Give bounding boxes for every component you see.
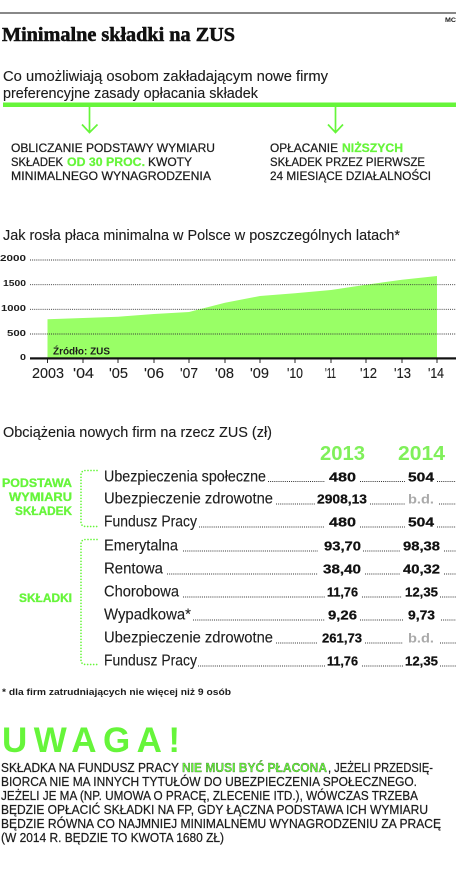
x axis labels: [32, 366, 444, 382]
row: ubezpieczenie zdrowotne: [104, 490, 434, 508]
row: emerytalna: 93,70: [324, 538, 361, 554]
source: Źródło: ZUS: [53, 344, 110, 358]
table: [2, 443, 456, 670]
section 1: preferential rules: [3, 68, 456, 183]
row: fundusz pracy: [104, 652, 438, 670]
label: składki: SKŁADKI: [19, 593, 72, 605]
title: Minimalne składki na ZUS: [2, 24, 235, 46]
row: fundusz pracy: 504: [408, 514, 435, 530]
green bar: [3, 102, 456, 107]
x axis labels: 2003: [32, 366, 64, 382]
row: rentowa: 40,32: [403, 562, 440, 576]
bracket 2: [81, 540, 97, 664]
warning text: BIORCA NIE MA INNYCH TYTUŁÓW DO UBEZPIECZENIA SPOŁECZNEGO.: [1, 774, 417, 789]
table heading: Obciążenia nowych firm na rzecz ZUS (zł): [3, 424, 272, 441]
row: fundusz pracy: 11,76: [327, 654, 358, 668]
row: wypadkowa: 9,73: [408, 608, 435, 622]
intro text: preferencyjne zasady opłacania składek: [3, 85, 258, 102]
row: ubezpieczenie zdrowotne: b.d.: [408, 492, 434, 506]
y axis labels: 0: [20, 352, 26, 362]
y axis labels: 1000: [1, 303, 26, 313]
row: ubezpieczenie zdrowotne: b.d.: [408, 630, 434, 646]
warning text: BĘDZIE OPŁACIĆ SKŁADKI NA FP, GDY ŁĄCZNA PODSTAWA ICH WYMIARU: [1, 802, 428, 817]
row: ubezpieczenie zdrowotne: Ubezpieczenie zdrowotne: [104, 630, 273, 646]
row: chorobowa: 11,76: [327, 584, 358, 600]
intro text: Co umożliwiają osobom zakładającym nowe firmy: [3, 68, 328, 85]
row: fundusz pracy: Fundusz Pracy: [104, 514, 197, 530]
arrow left: [82, 107, 98, 132]
row: wypadkowa: [104, 606, 435, 624]
footnote: * dla firm zatrudniających nie więcej niż 9 osób: [2, 687, 231, 698]
x axis labels: '12: [360, 366, 377, 382]
right text: [270, 142, 431, 183]
warning text: BĘDZIE RÓWNA CO NAJMNIEJ MINIMALNEMU WYNAGRODZENIU ZA PRACĘ: [1, 816, 441, 831]
left text: [11, 143, 215, 183]
row: emerytalna: Emerytalna: [104, 538, 178, 554]
row: ubezpieczenie zdrowotne: Ubezpieczenie zdrowotne: [104, 490, 273, 508]
dot leaders: [167, 482, 456, 666]
row: emerytalna: 98,38: [403, 538, 440, 554]
x axis labels: '09: [250, 366, 269, 382]
chart heading: Jak rosła płaca minimalna w Polsce w poszczególnych latach*: [3, 227, 400, 244]
arrow right: [328, 107, 343, 132]
x axis labels: '13: [394, 366, 411, 382]
row: ubezpieczenia społeczne: Ubezpieczenia społeczne: [104, 468, 266, 486]
x axis labels: '14: [428, 366, 444, 382]
row: wypadkowa: Wypadkowa*: [104, 606, 191, 624]
credit: MC: [445, 17, 456, 24]
row: wypadkowa: 9,26: [328, 608, 357, 622]
row: ubezpieczenia społeczne: [104, 468, 435, 486]
row: emerytalna: [104, 538, 440, 554]
warning heading: UWAGA!: [2, 721, 180, 760]
group label: podstawa wymiaru składek: SKŁADEK: [15, 506, 73, 518]
bracket 1: [81, 470, 97, 526]
warning text: , JEŻELI PRZEDSIĘ-: [328, 761, 433, 775]
left text: OD 30 PROC.: [67, 157, 145, 169]
row: ubezpieczenia społeczne: 504: [408, 470, 435, 484]
row: rentowa: 38,40: [323, 562, 361, 576]
right text: OPŁACANIE: [270, 143, 338, 155]
y axis labels: 500: [7, 328, 26, 338]
row: fundusz pracy: Fundusz Pracy: [104, 652, 197, 670]
area chart: [0, 253, 456, 382]
group label: podstawa wymiaru składek: [2, 478, 73, 518]
row: rentowa: [104, 560, 440, 578]
intro text: [3, 68, 328, 102]
year headers: 2014: [398, 443, 446, 465]
row: chorobowa: [104, 584, 438, 600]
right text: 24 MIESIĄCE DZIAŁALNOŚCI: [270, 170, 431, 183]
year headers: 2013: [320, 443, 365, 465]
row: fundusz pracy: 12,35: [405, 654, 438, 668]
x axis labels: '04: [73, 366, 94, 382]
warning text: [1, 760, 441, 845]
group label: podstawa wymiaru składek: PODSTAWA: [2, 478, 72, 490]
row: ubezpieczenie zdrowotne: 2908,13: [317, 492, 367, 506]
right text: SKŁADEK PRZEZ PIERWSZE: [270, 157, 425, 169]
left text: MINIMALNEGO WYNAGRODZENIA: [11, 171, 211, 183]
y axis labels: [0, 253, 26, 362]
row: chorobowa: Chorobowa: [104, 584, 179, 600]
right text: NIŻSZYCH: [342, 142, 403, 155]
x axis labels: '05: [109, 366, 128, 382]
x axis labels: '11: [325, 366, 336, 382]
warning text: NIE MUSI BYĆ PŁACONA: [182, 760, 327, 775]
row: ubezpieczenie zdrowotne: [104, 630, 434, 646]
row: ubezpieczenie zdrowotne: 261,73: [322, 630, 362, 646]
x axis labels: '07: [180, 366, 198, 382]
x axis labels: '10: [287, 366, 303, 382]
year headers: [320, 443, 446, 465]
warning text: (W 2014 R. BĘDZIE TO KWOTA 1680 ZŁ): [1, 831, 224, 845]
x axis labels: '06: [144, 366, 164, 382]
y axis labels: 1500: [3, 278, 26, 288]
x axis labels: '08: [215, 366, 234, 382]
group label: podstawa wymiaru składek: WYMIARU: [9, 492, 72, 504]
left text: OBLICZANIE PODSTAWY WYMIARU: [11, 143, 215, 155]
area: minimum wage: [48, 276, 437, 358]
warning text: SKŁADKA NA FUNDUSZ PRACY: [1, 761, 180, 775]
left text: KWOTY: [148, 157, 192, 169]
left text: SKŁADEK: [11, 157, 63, 169]
row: fundusz pracy: 480: [329, 514, 356, 530]
row: chorobowa: 12,35: [405, 584, 438, 600]
row: fundusz pracy: [104, 514, 435, 530]
row: rentowa: Rentowa: [104, 560, 163, 578]
row: ubezpieczenia społeczne: 480: [329, 470, 356, 484]
warning text: JEŻELI JE MA (NP. UMOWA O PRACĘ, ZLECENIE ITD.), WÓWCZAS TRZEBA: [1, 788, 419, 803]
y axis labels: 2000: [0, 253, 26, 263]
